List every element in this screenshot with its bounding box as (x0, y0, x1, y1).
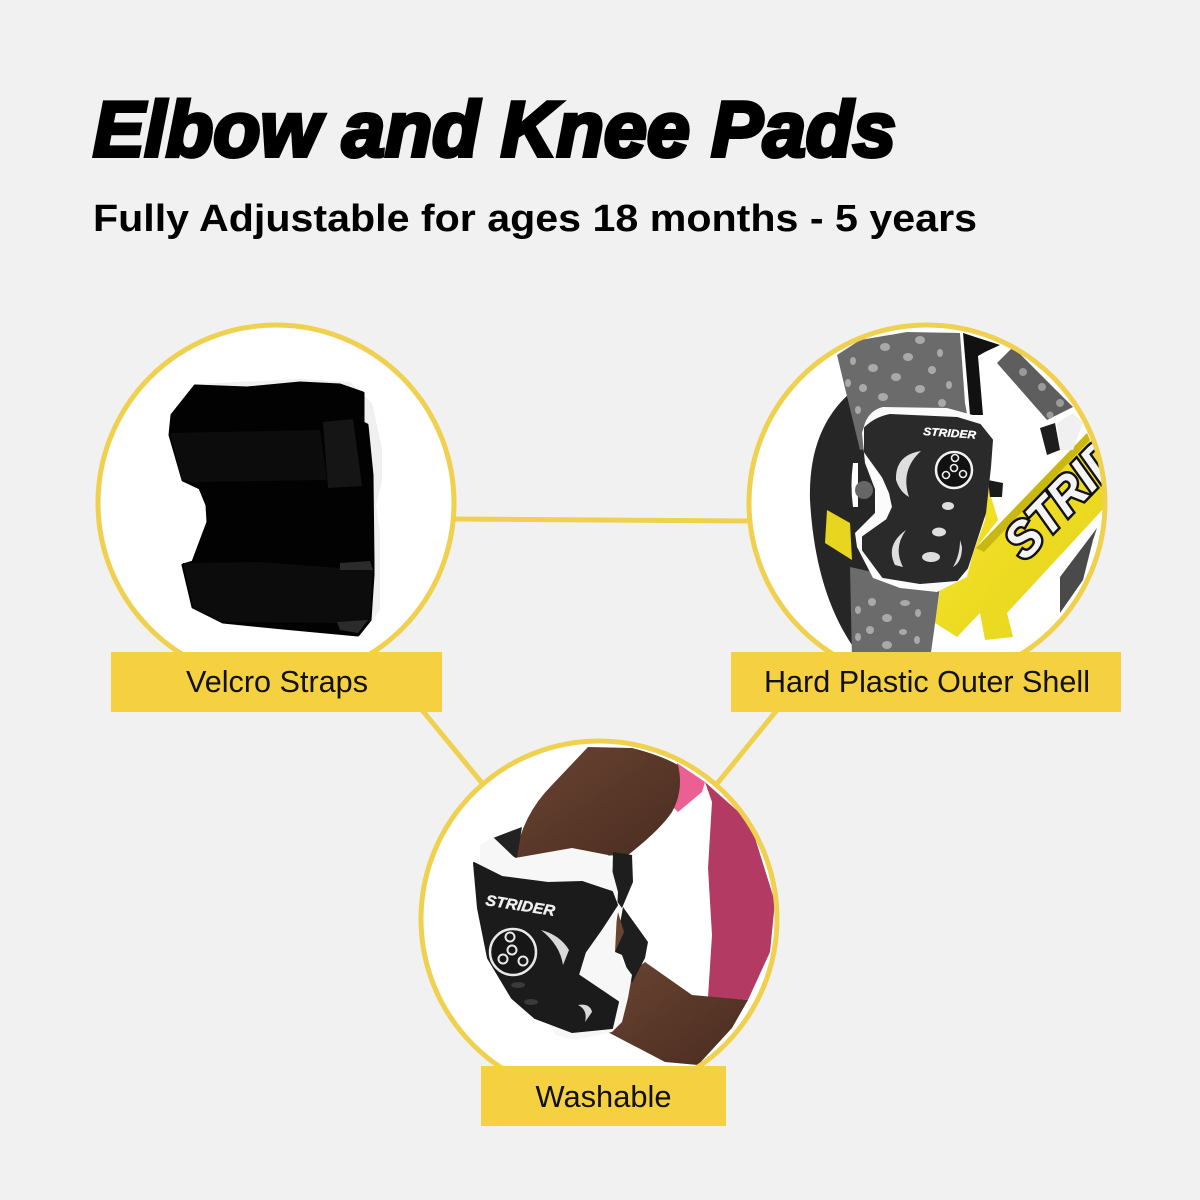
icon: logo wordmark: STRIDER (923, 426, 977, 442)
title: Elbow and Knee Pads (93, 85, 896, 173)
panel: velcro straps photo (98, 325, 454, 681)
icon: logo circle (936, 452, 972, 488)
icon: upper arm (515, 747, 680, 858)
icon: frame logo: STRIDER (993, 380, 1179, 570)
label: washable: Washable (536, 1079, 672, 1114)
label: velcro straps: Velcro Straps (186, 664, 368, 699)
icon: bike post (963, 333, 1000, 415)
label: washable (481, 1066, 726, 1126)
icon: shell cutouts (892, 451, 962, 567)
icon: rear white pad and buckle (1057, 413, 1083, 450)
icon: logo circle (490, 929, 536, 975)
icon: inner strap (493, 827, 522, 858)
icon: pink sleeve (673, 763, 705, 812)
subtitle: Fully Adjustable for ages 18 months - 5 years (93, 198, 977, 240)
icon: logo wordmark: STRIDER (484, 892, 556, 920)
label: hard plastic outer shell: Hard Plastic Outer Shell (764, 664, 1090, 699)
connector lines (422, 519, 777, 785)
label: velcro straps (111, 652, 442, 712)
icon: black elbow shell (474, 863, 618, 1032)
icon: second leg (997, 347, 1073, 420)
icon: patterned leg (837, 332, 970, 450)
panel: washable photo (421, 741, 777, 1097)
icon: top velcro strap (170, 430, 327, 482)
icon: black knee pad shell (863, 415, 992, 583)
icon: shell cutouts (511, 930, 592, 1022)
panel: hard plastic shell photo (746, 322, 1108, 652)
icon: top strap buckle (323, 419, 362, 488)
label: hard plastic outer shell (731, 652, 1121, 712)
icon: yellow bike frame (935, 433, 1105, 640)
icon: bottom strap buckle (337, 561, 373, 633)
icon: black pad back (170, 383, 373, 635)
icon: bike wheel (810, 393, 875, 660)
icon: white pad edge (493, 838, 632, 1033)
icon: white pad edge (195, 379, 382, 636)
icon: white knee pad shell (855, 407, 974, 592)
icon: side buckle (988, 480, 1003, 497)
icon: yellow axle bracket (825, 510, 852, 560)
icon: arm straps (612, 852, 633, 908)
icon: forearm (600, 962, 748, 1065)
icon: maroon shirt (705, 782, 775, 1000)
icon: bottom velcro strap (183, 562, 373, 623)
